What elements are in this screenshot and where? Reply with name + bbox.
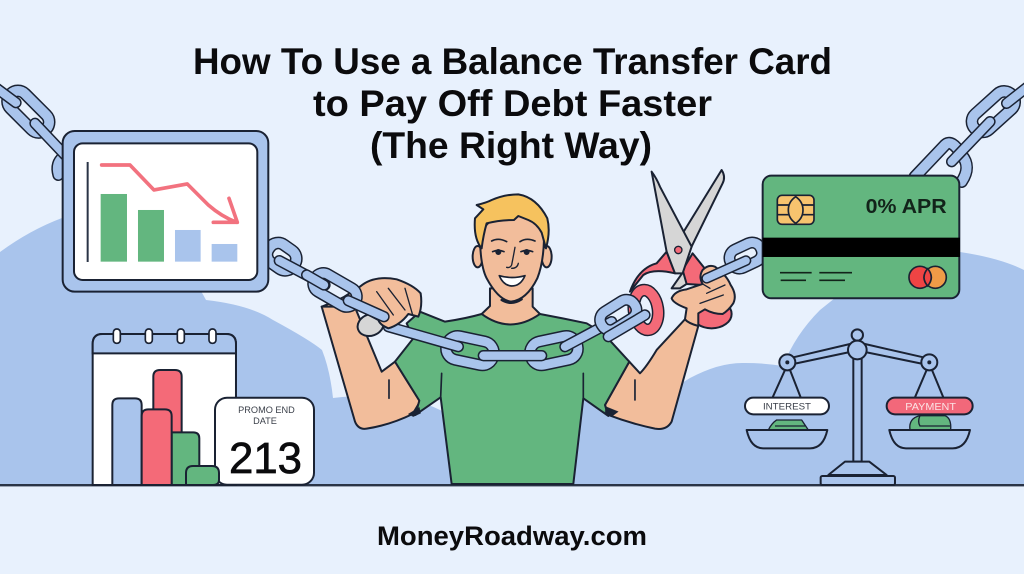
interest label: INTEREST: [763, 401, 811, 411]
sleeve shadows: [408, 407, 618, 417]
right handle: [683, 253, 710, 285]
small green bar over the card: [186, 466, 219, 485]
hair: [475, 194, 549, 248]
payment label: [887, 398, 973, 414]
card chip: [777, 195, 814, 224]
facial features: [492, 239, 535, 303]
title: to Pay Off Debt Faster: [313, 83, 712, 124]
scissors: [630, 170, 732, 331]
title: How To Use a Balance Transfer Card: [193, 41, 832, 82]
right money: [910, 416, 951, 430]
neck: [482, 288, 540, 324]
promo end date card: [215, 398, 314, 485]
chain: upper left: [0, 87, 65, 175]
tablet with falling bar chart: [63, 131, 268, 292]
title: [193, 41, 832, 166]
left hand gripping chain: [322, 278, 421, 340]
payment label: PAYMENT: [905, 402, 956, 413]
credit card 0% APR: [763, 176, 960, 298]
footer website: MoneyRoadway.com: [377, 521, 647, 551]
calendar with bars: [93, 329, 236, 485]
shirt detail lines: [389, 373, 635, 400]
left blade: [652, 172, 692, 273]
chain: across the chest: [388, 322, 612, 367]
promo end date card: DATE: [253, 416, 277, 426]
chain: man to credit card: [707, 239, 765, 278]
ground line: [0, 484, 1024, 486]
face: [480, 213, 544, 302]
interest label: [745, 398, 829, 414]
left money: [768, 420, 808, 430]
left arm: [322, 303, 420, 429]
right blade: [682, 170, 724, 250]
chain: upper right: [915, 85, 1024, 182]
balance scale: [745, 329, 973, 485]
left handle ring: [630, 252, 675, 292]
ears: [473, 246, 552, 267]
chain: upper links at both hands: [307, 270, 645, 337]
promo end date card: 213: [229, 434, 302, 483]
credit card 0% APR: 0% APR: [866, 196, 947, 218]
green shirt: [395, 312, 629, 484]
pans: [747, 430, 827, 448]
right hand holding scissors: [672, 266, 735, 326]
background hills: [0, 218, 1024, 485]
chain: from tablet to man: [263, 239, 325, 285]
card network logo: [909, 266, 946, 288]
title: (The Right Way): [370, 125, 652, 166]
promo end date card: PROMO END: [238, 405, 295, 415]
right arm: [605, 319, 698, 429]
man holding the chain: [322, 194, 698, 484]
